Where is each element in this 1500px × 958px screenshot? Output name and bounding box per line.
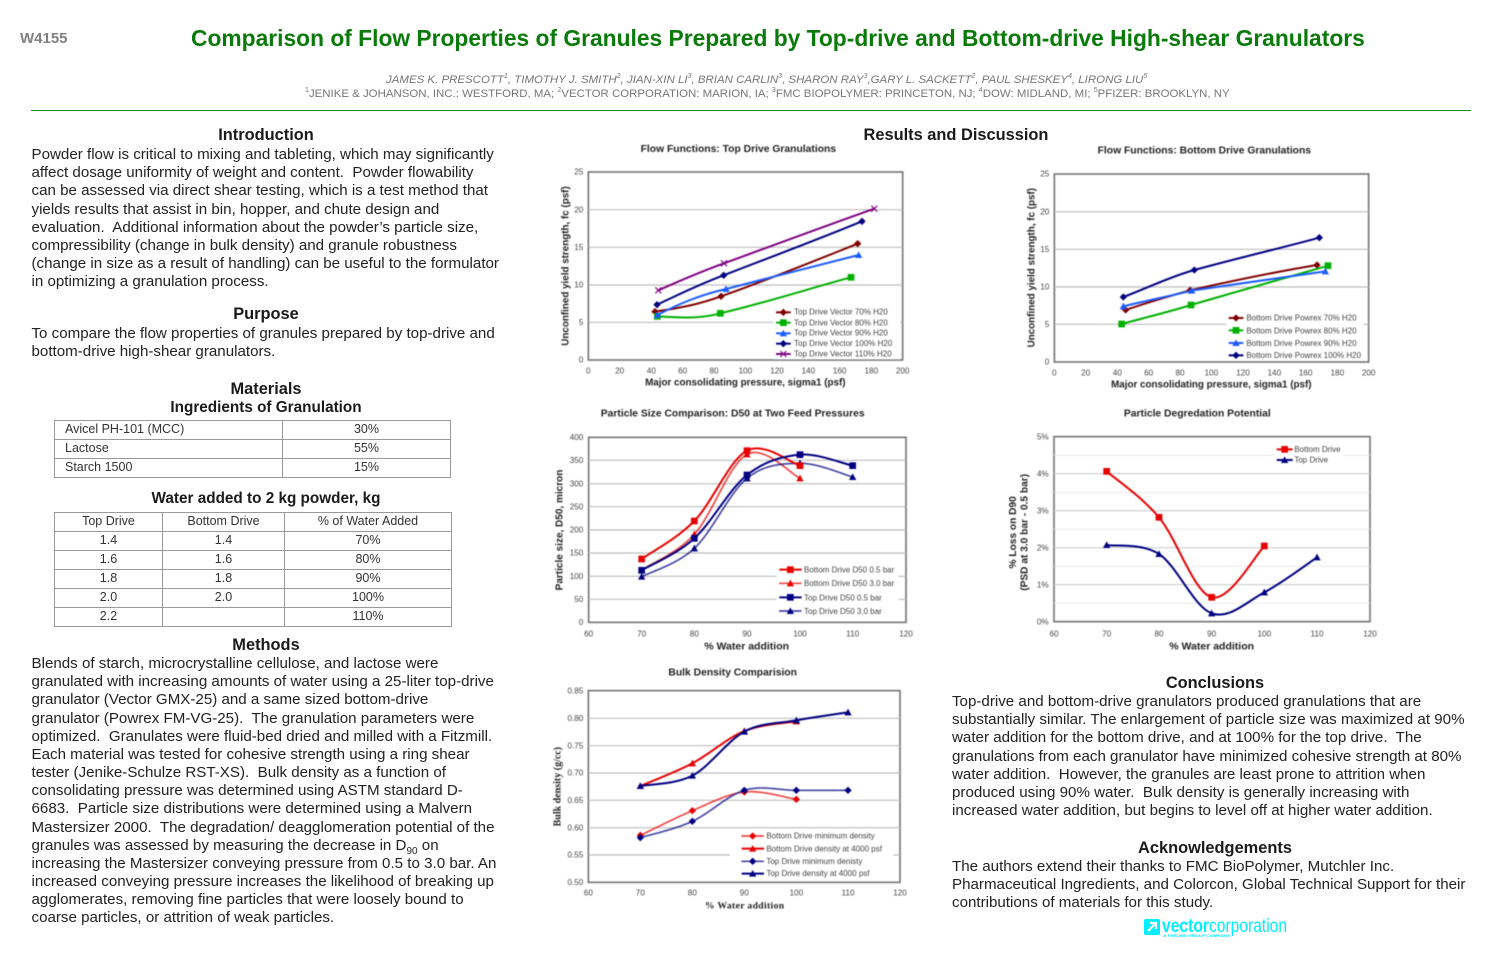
legend: Top Drive	[1294, 456, 1329, 465]
x axis label: % Water addition	[1169, 640, 1254, 652]
x axis ticks: 120	[770, 366, 784, 375]
series: top drive	[1107, 545, 1317, 615]
table: ingredients: Avicel PH-101 (MCC)	[65, 422, 184, 436]
y axis ticks: 0.50	[567, 878, 584, 887]
legend: Bottom Drive Powrex 100% H20	[1246, 351, 1362, 360]
text: methods: granules was assessed by measuring the decrease in D90 on	[32, 837, 439, 857]
legend: Bottom Drive minimum density	[766, 832, 875, 841]
chart title: Particle Degredation Potential	[1124, 409, 1271, 420]
text: methods: optimized. Granulates were fluid-bed dried and milled with a Fitzmill.	[32, 728, 492, 745]
y axis ticks: 5	[1045, 320, 1050, 329]
table: ingredients: 55%	[354, 440, 379, 454]
y axis ticks: 2%	[1037, 543, 1049, 552]
x axis label: Major consolidating pressure, sigma1 (psf)	[1111, 379, 1312, 390]
text: introduction: can be assessed via direct shear testing, which is a test method that	[32, 182, 488, 199]
legend: Top Drive Vector 80% H20	[794, 318, 888, 327]
legend: Bottom Drive	[1294, 445, 1341, 454]
table: water added: 1.4	[215, 532, 232, 546]
x axis ticks: 100	[1205, 368, 1219, 377]
legend: Bottom Drive Powrex 80% H20	[1246, 326, 1357, 335]
table: water added: Top Drive	[82, 514, 135, 528]
y axis label: % Loss on D90	[1008, 496, 1019, 568]
text: conclusions: water addition. However, the granules are least prone to attrition when	[952, 766, 1425, 783]
y axis ticks: 0.80	[567, 714, 584, 723]
x axis ticks: 80	[1175, 368, 1185, 377]
y axis ticks: 10	[574, 281, 584, 290]
x axis ticks: 160	[1299, 368, 1313, 377]
y axis ticks: 5%	[1037, 432, 1049, 441]
y axis ticks: 50	[574, 595, 584, 604]
table: water added: 90%	[355, 570, 381, 584]
y axis ticks: 15	[574, 243, 584, 252]
x axis ticks: 140	[1268, 368, 1282, 377]
x axis label: Major consolidating pressure, sigma1 (psf)	[645, 378, 846, 389]
x axis ticks: 160	[833, 366, 847, 375]
y axis label: Unconfined yield strength, fc (psf)	[560, 186, 571, 346]
text: conclusions	[952, 693, 1465, 819]
x axis ticks: 110	[1310, 629, 1324, 638]
chart: bulk density comparison	[552, 667, 908, 911]
logo: vector corporation: corporation	[1209, 916, 1287, 937]
text: conclusions: produced using 90% water. Bulk density is generally increasing with	[952, 784, 1409, 801]
table: water added: 1.6	[215, 552, 232, 566]
text: conclusions: water addition for the bottom drive, and at 100% for the top drive. The	[952, 729, 1422, 746]
text: methods: increasing the Mastersizer conveying pressure from 0.5 to 3.0 bar. An	[32, 855, 496, 872]
authors: JAMES K. PRESCOTT1, TIMOTHY J. SMITH2, JIAN-XIN LI3, BRIAN CARLIN3, SHARON RAY3,GARY L. SACKETT2, PAUL SHESKEY4, LIRONG LIU5	[386, 72, 1147, 86]
x axis ticks: 20	[615, 366, 625, 375]
x axis ticks: 120	[1363, 629, 1377, 638]
x axis ticks	[584, 888, 907, 897]
table: water added: 2.0	[215, 590, 232, 604]
chart title: Flow Functions: Top Drive Granulations	[641, 144, 836, 155]
text: methods: increased conveying pressure increases the likelihood of breaking up	[32, 873, 494, 890]
table: water added: 1.4	[100, 532, 117, 546]
y axis ticks: 10	[1040, 283, 1050, 292]
y axis ticks: 5	[579, 318, 584, 327]
legend: Bottom Drive density at 4000 psf	[766, 844, 883, 853]
table: water added: Bottom Drive	[187, 514, 260, 528]
affiliations: 1JENIKE & JOHANSON, INC.: WESTFORD, MA; 2VECTOR CORPORATION: MARION, IA; 3FMC BIOPOLYMER: PRINCETON, NJ; 4DOW: MIDLAND, MI; 5PFIZER: BROOKLYN, NY	[305, 86, 1230, 100]
legend	[773, 307, 900, 359]
x axis ticks	[584, 629, 913, 638]
x axis ticks: 120	[899, 629, 913, 638]
heading: conclusions: Conclusions	[1166, 674, 1264, 692]
x axis ticks: 40	[647, 366, 656, 375]
x axis ticks	[586, 366, 910, 375]
series: bottom drive minimum density	[640, 792, 796, 835]
chart: particle size comparison	[554, 408, 914, 652]
series: bottom drive density at 4000 psf	[640, 721, 796, 786]
logo: vector corporation	[1144, 916, 1287, 938]
table: water added: 70%	[355, 532, 381, 546]
series: top drive density at 4000 psf	[640, 712, 848, 786]
heading: acknowledgements: Acknowledgements	[1138, 838, 1292, 856]
y axis ticks: 150	[570, 549, 584, 558]
heading: purpose: Purpose	[233, 305, 299, 323]
y axis ticks: 25	[1040, 170, 1050, 179]
chart title: Bulk Density Comparision	[668, 667, 797, 678]
table: water added	[54, 512, 452, 627]
chart title: Particle Size Comparison: D50 at Two Feed Pressures	[601, 409, 865, 420]
text: conclusions: granulations from each granulator have minimized cohesive strength at 80%	[952, 748, 1462, 765]
y axis ticks: 0.60	[567, 823, 584, 832]
text: introduction: (change in size as a result of handling) can be useful to the formulator	[32, 255, 499, 272]
x axis ticks: 90	[740, 888, 749, 897]
x axis ticks: 0	[586, 366, 591, 375]
text: methods: 6683. Particle size distributions were determined using a Malvern	[32, 800, 472, 817]
x axis ticks: 180	[1331, 368, 1345, 377]
y axis label: Bulk density (g/cc)	[553, 747, 564, 826]
text: acknowledgements: contributions of materials for this study.	[952, 894, 1213, 911]
text: methods: granulated with increasing amounts of water using a 25-liter top-drive	[32, 673, 494, 690]
text: introduction: evaluation. Additional information about the powder’s particle size,	[32, 219, 478, 236]
y axis ticks: 350	[570, 456, 584, 465]
y axis ticks	[567, 686, 584, 887]
x axis ticks: 70	[637, 629, 647, 638]
x axis ticks: 110	[841, 888, 855, 897]
x axis ticks: 60	[1049, 629, 1059, 638]
x axis ticks: 180	[865, 366, 879, 375]
text: conclusions: Top-drive and bottom-drive granulators produced granulations that are	[952, 693, 1421, 710]
series: top drive minimum density	[640, 788, 848, 838]
y axis ticks	[1040, 170, 1050, 367]
text: methods: tester (Jenike-Schulze RST-XS). Bulk density as a function of	[32, 764, 446, 781]
y axis ticks	[1037, 432, 1049, 626]
text: methods: Mastersizer 2000. The degradation/ deagglomeration potential of the	[32, 819, 495, 836]
x axis label: % Water addition	[704, 640, 789, 652]
table: water added: 2.2	[100, 608, 117, 622]
text: acknowledgements: Pharmaceutical Ingredients, and Colorcon, Global Technical Support for their	[952, 876, 1465, 893]
legend: Top Drive Vector 70% H20	[794, 308, 888, 317]
y axis label: (PSD at 3.0 bar - 0.5 bar)	[1020, 474, 1031, 591]
text: introduction	[32, 146, 499, 290]
table: water added: 1.8	[100, 570, 117, 584]
series: 100%	[657, 221, 862, 305]
x axis ticks	[1049, 629, 1377, 638]
text: introduction: in optimizing a granulation process.	[32, 273, 269, 290]
legend: Top Drive minimum denisty	[766, 857, 862, 866]
y axis ticks: 0.70	[567, 769, 584, 778]
legend	[1275, 443, 1343, 465]
x axis ticks	[1052, 368, 1376, 377]
text: methods: Each material was tested for cohesive strength using a ring shear	[32, 746, 470, 763]
x axis ticks: 110	[846, 629, 860, 638]
y axis ticks: 20	[1040, 207, 1050, 216]
x axis ticks: 70	[1102, 629, 1112, 638]
y axis ticks	[574, 168, 584, 365]
y axis ticks: 4%	[1037, 469, 1049, 478]
y axis label: Unconfined yield strength, fc (psf)	[1026, 188, 1037, 347]
y axis ticks: 0.85	[567, 686, 584, 695]
x axis ticks: 90	[742, 629, 752, 638]
table: water added: 100%	[352, 590, 384, 604]
text: conclusions: increased water addition, but begins to level off at higher water addition.	[952, 802, 1433, 819]
text: methods	[32, 655, 496, 926]
x axis ticks: 120	[1236, 368, 1250, 377]
table: ingredients: 30%	[354, 422, 379, 436]
text: purpose	[32, 324, 495, 360]
x axis ticks: 100	[739, 366, 753, 375]
x axis ticks: 200	[896, 366, 910, 375]
y axis ticks: 100	[570, 572, 584, 581]
text: methods: Blends of starch, microcrystalline cellulose, and lactose were	[32, 655, 438, 672]
legend: Bottom Drive Powrex 90% H20	[1246, 339, 1357, 348]
heading: introduction: Introduction	[218, 126, 314, 144]
x axis ticks: 60	[584, 629, 594, 638]
text: methods: granulator (Vector GMX-25) and a same sized bottom-drive	[32, 691, 428, 708]
y axis ticks: 15	[1040, 245, 1050, 254]
legend: Top Drive Vector 100% H20	[794, 339, 893, 348]
legend: Top Drive Vector 110% H20	[794, 350, 892, 359]
series: 80%	[1122, 266, 1328, 324]
text: methods: coarse particles, or attrition of weak particles.	[32, 909, 334, 926]
y axis ticks: 0.65	[567, 796, 584, 805]
x axis ticks: 0	[1052, 368, 1057, 377]
table: ingredients: Starch 1500	[65, 460, 132, 474]
text: methods: granulator (Powrex FM-VG-25). The granulation parameters were	[32, 710, 474, 727]
text: introduction: yields results that assist in bin, hopper, and chute design and	[32, 201, 439, 218]
x axis ticks: 70	[636, 888, 645, 897]
series: bottom drive	[1107, 471, 1264, 598]
chart: particle degradation potential	[1008, 408, 1378, 652]
series: 70%	[655, 244, 858, 312]
legend: Bottom Drive D50 0.5 bar	[804, 565, 895, 574]
table: water added: 110%	[352, 608, 384, 622]
y axis ticks	[570, 433, 584, 627]
x axis ticks: 80	[690, 629, 699, 638]
y axis ticks: 200	[570, 526, 584, 535]
y axis ticks: 0	[579, 618, 584, 627]
table: water added: 1.8	[215, 570, 232, 584]
series: top drive 3.0 bar	[642, 463, 853, 577]
legend	[730, 830, 893, 880]
y axis ticks: 3%	[1037, 506, 1049, 515]
x axis ticks: 80	[1154, 629, 1164, 638]
legend: Top Drive D50 3.0 bar	[804, 607, 882, 616]
tagline: A FREUND GROUP COMPANY	[1163, 933, 1230, 938]
legend	[1227, 313, 1363, 361]
legend: Bottom Drive D50 3.0 bar	[804, 579, 895, 588]
x axis ticks: 40	[1113, 368, 1122, 377]
y axis label	[1008, 474, 1031, 591]
y axis ticks: 0%	[1037, 617, 1049, 626]
x axis ticks: 100	[793, 629, 807, 638]
x axis ticks: 60	[584, 888, 593, 897]
x axis ticks: 100	[1258, 629, 1272, 638]
text: introduction: Powder flow is critical to mixing and tableting, which may significantly	[32, 146, 494, 163]
table: water added: % of Water Added	[318, 514, 418, 528]
y axis ticks: 1%	[1037, 580, 1049, 589]
heading: methods: Methods	[232, 636, 300, 654]
x axis ticks: 90	[1207, 629, 1217, 638]
x axis ticks: 100	[790, 888, 804, 897]
x axis label: % Water addition	[705, 900, 785, 911]
y axis ticks: 250	[570, 502, 584, 511]
text: introduction: affect dosage uniformity of weight and content. Powder flowability	[32, 164, 473, 181]
table: water added: 2.0	[100, 590, 117, 604]
series: bottom drive 3.0 bar	[642, 453, 800, 570]
y axis ticks: 20	[574, 205, 584, 214]
text: acknowledgements	[952, 858, 1466, 911]
y axis ticks: 25	[574, 168, 584, 177]
heading: materials: Materials	[230, 380, 302, 398]
legend: Bottom Drive Powrex 70% H20	[1246, 314, 1357, 323]
legend: Top Drive D50 0.5 bar	[804, 593, 882, 602]
x axis ticks: 80	[709, 366, 719, 375]
x axis ticks: 200	[1362, 368, 1376, 377]
chart: flow functions top drive	[560, 144, 910, 389]
y axis ticks: 0.75	[567, 741, 584, 750]
chart: flow functions bottom drive	[1026, 145, 1376, 390]
table: ingredients	[54, 420, 451, 478]
x axis ticks: 80	[688, 888, 697, 897]
text: introduction: compressibility (change in bulk density) and granule robustness	[32, 237, 457, 254]
series: 90%	[657, 255, 859, 315]
series: bottom drive 0.5 bar	[642, 448, 800, 559]
wordmark: vector	[1162, 916, 1209, 937]
heading: water added: Water added to 2 kg powder, kg	[152, 490, 380, 507]
text: methods: agglomerates, removing fine particles that were loosely bound to	[32, 891, 464, 908]
y axis ticks: 400	[570, 433, 584, 442]
text: purpose: To compare the flow properties of granules prepared by top-drive and	[32, 324, 495, 342]
heading: ingredients: Ingredients of Granulation	[170, 399, 362, 416]
series: 70%	[1126, 265, 1317, 310]
legend: Top Drive Vector 90% H20	[794, 329, 888, 338]
series: 80%	[657, 277, 851, 317]
table: water added: 80%	[355, 552, 381, 566]
text: conclusions: substantially similar. The enlargement of particle size was maximized at 90%	[952, 711, 1465, 728]
table: ingredients: Lactose	[65, 440, 109, 454]
y axis label: Particle size, D50, micron	[555, 470, 566, 590]
x axis ticks: 140	[802, 366, 816, 375]
poster code: W4155	[20, 30, 68, 47]
title: Comparison of Flow Properties of Granules Prepared by Top-drive and Bottom-drive High-shear Granulators	[191, 25, 1365, 51]
y axis ticks: 0	[579, 356, 584, 365]
y axis ticks: 300	[570, 479, 584, 488]
x axis ticks: 20	[1081, 368, 1091, 377]
legend: Top Drive density at 4000 psf	[766, 869, 870, 878]
series: 110%	[658, 209, 874, 290]
x axis ticks: 120	[893, 888, 907, 897]
chart title: Flow Functions: Bottom Drive Granulations	[1098, 145, 1311, 156]
text: acknowledgements: The authors extend their thanks to FMC BioPolymer, Mutchler Inc.	[952, 858, 1394, 875]
x axis ticks: 60	[678, 366, 688, 375]
y axis ticks: 0.55	[567, 851, 584, 860]
y axis ticks: 0	[1045, 358, 1050, 367]
table: ingredients: 15%	[354, 460, 379, 474]
table: water added: 1.6	[100, 552, 117, 566]
series: top drive 0.5 bar	[642, 454, 853, 570]
text: methods: consolidating pressure was determined using ASTM standard D-	[32, 782, 463, 799]
heading: results and discussion: Results and Discussion	[864, 126, 1048, 144]
x axis ticks: 60	[1144, 368, 1154, 377]
icon: arrow square	[1144, 919, 1160, 935]
legend	[777, 563, 898, 620]
text: purpose: bottom-drive high-shear granulators.	[32, 343, 275, 360]
series: 90%	[1123, 271, 1325, 306]
series: 100%	[1123, 238, 1319, 297]
